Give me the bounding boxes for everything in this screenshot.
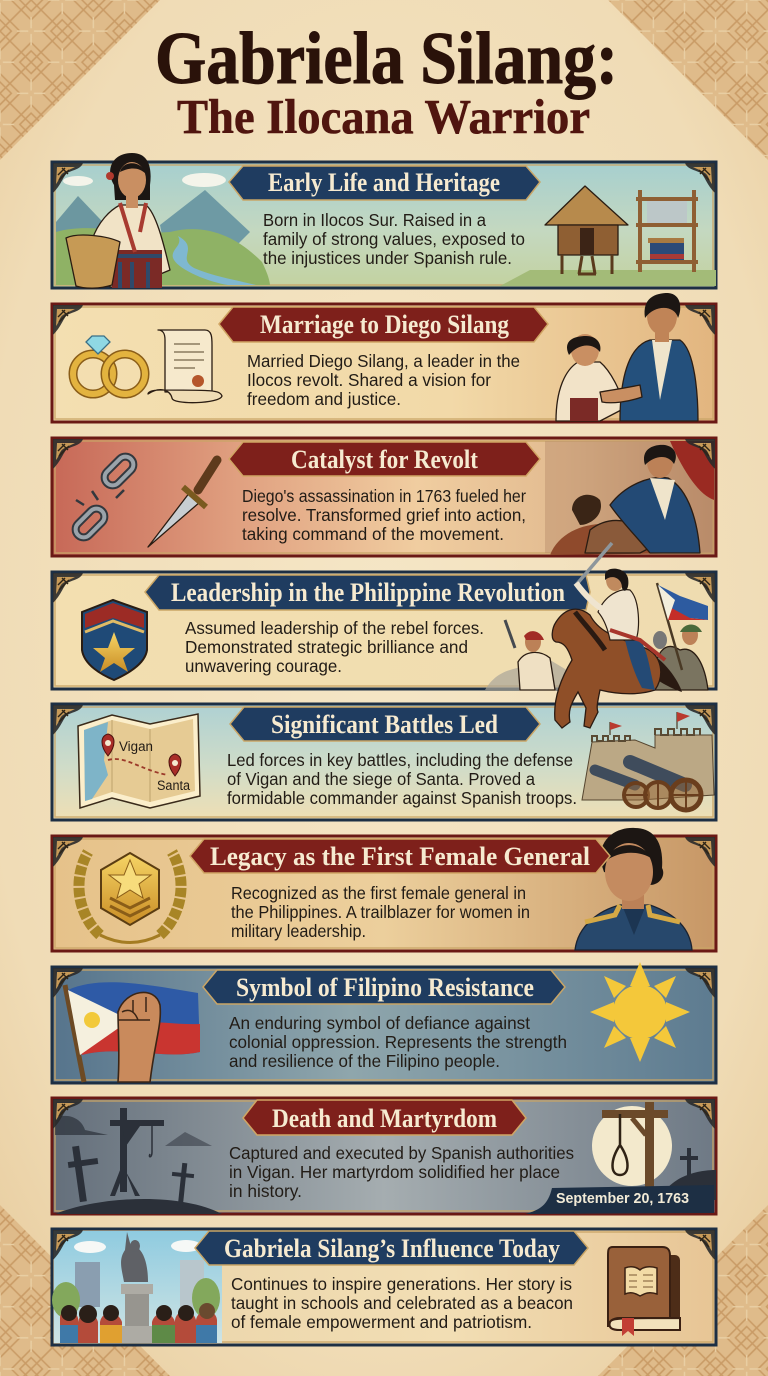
text: early life: the injustices under Spanish rule. xyxy=(263,248,512,268)
text: battles xyxy=(227,750,577,808)
text: early life: Born in Ilocos Sur. Raised in a xyxy=(263,210,486,230)
icon: broken chain xyxy=(72,453,137,541)
text: leadership: Demonstrated strategic brilliance and xyxy=(185,637,468,657)
icon: scroll xyxy=(148,330,222,403)
text: influence xyxy=(231,1274,573,1332)
heading: death: Death and Martyrdom xyxy=(272,1104,497,1133)
text: leadership: unwavering courage. xyxy=(185,656,342,676)
text: resistance: An enduring symbol of defiance against xyxy=(229,1013,530,1033)
text: catalyst: Diego's assassination in 1763 fueled her xyxy=(242,486,526,506)
text: influence: of female empowerment and patriotism. xyxy=(231,1312,532,1332)
panel: catalyst xyxy=(52,438,716,556)
text: catalyst: taking command of the movement. xyxy=(242,524,504,544)
corner pattern: bottom right xyxy=(598,1205,768,1376)
map xyxy=(78,714,200,808)
text: resistance: and resilience of the Filipino people. xyxy=(229,1051,500,1071)
text: early life: family of strong values, exposed to xyxy=(263,229,525,249)
scene: assassination xyxy=(545,441,714,555)
title xyxy=(155,18,618,144)
panel: leadership xyxy=(52,572,716,690)
heading: marriage: Marriage to Diego Silang xyxy=(260,310,509,339)
text: battles: formidable commander against Spanish troops. xyxy=(227,788,577,808)
icon: book xyxy=(608,1247,680,1336)
map: Vigan xyxy=(119,739,153,754)
text: marriage: Ilocos revolt. Shared a vision for xyxy=(247,370,491,390)
text: legacy: Recognized as the first female general in xyxy=(231,883,526,903)
text: leadership xyxy=(185,618,484,676)
date plate xyxy=(525,1185,714,1214)
icon: gold rings xyxy=(73,336,145,394)
heading: catalyst: Catalyst for Revolt xyxy=(291,445,478,474)
couple xyxy=(556,293,698,421)
title: The Ilocana Warrior xyxy=(177,89,590,144)
icon: dagger xyxy=(148,460,217,547)
heading: battles xyxy=(230,707,540,741)
text: legacy: the Philippines. A trailblazer for women in xyxy=(231,902,530,922)
date plate: September 20, 1763 xyxy=(556,1190,689,1207)
soldiers xyxy=(485,620,708,690)
text: marriage: freedom and justice. xyxy=(247,389,401,409)
heading: legacy: Legacy as the First Female General xyxy=(210,842,590,871)
panel: death xyxy=(52,1098,716,1214)
heading: resistance: Symbol of Filipino Resistance xyxy=(236,973,534,1002)
text: marriage xyxy=(247,351,520,409)
fort and cannons xyxy=(582,712,714,810)
text: death: in history. xyxy=(229,1181,302,1201)
heading: early life: Early Life and Heritage xyxy=(268,168,500,197)
icon: shield xyxy=(82,600,147,680)
heading: leadership: Leadership in the Philippine Revolution xyxy=(171,578,565,607)
woman with basket xyxy=(66,153,170,288)
loom xyxy=(636,190,698,272)
panel: early life xyxy=(52,153,716,288)
text: battles: of Vigan and the siege of Santa. Proved a xyxy=(227,769,535,789)
flag xyxy=(657,583,708,670)
text: early life xyxy=(263,210,525,268)
text: resistance xyxy=(229,1013,567,1071)
rider on horse xyxy=(552,543,682,728)
title: Gabriela Silang: xyxy=(155,18,618,100)
text: legacy: military leadership. xyxy=(231,921,366,941)
corner pattern: top left xyxy=(0,0,160,160)
panel: resistance xyxy=(52,962,716,1083)
hut xyxy=(500,186,716,286)
silhouette: left gallows and graves xyxy=(55,1108,222,1214)
heading: battles: Significant Battles Led xyxy=(271,710,498,739)
text: legacy xyxy=(231,883,530,941)
text: death xyxy=(229,1143,574,1201)
text: leadership: Assumed leadership of the rebel forces. xyxy=(185,618,484,638)
scene: statue and crowd xyxy=(52,1231,222,1343)
text: catalyst xyxy=(242,486,526,544)
scene: mountains and river xyxy=(56,173,270,285)
panel: marriage xyxy=(52,293,716,422)
corner pattern: bottom left xyxy=(0,1205,170,1376)
heading: influence: Gabriela Silang’s Influence Today xyxy=(224,1234,560,1263)
map: Santa xyxy=(157,778,190,793)
text: battles: Led forces in key battles, including the defense xyxy=(227,750,573,770)
panel: battles xyxy=(52,704,716,820)
panel: influence xyxy=(52,1229,716,1345)
text: resistance: colonial oppression. Represents the strength xyxy=(229,1032,567,1052)
text: marriage: Married Diego Silang, a leader in the xyxy=(247,351,520,371)
panel: legacy xyxy=(52,828,716,951)
text: influence: Continues to inspire generations. Her story is xyxy=(231,1274,572,1294)
heading: catalyst xyxy=(229,442,540,476)
icon: flag and fist xyxy=(65,982,200,1082)
panel corner ornaments xyxy=(53,163,715,1260)
text: death: Captured and executed by Spanish authorities xyxy=(229,1143,574,1163)
corner pattern: top right xyxy=(608,0,768,160)
text: catalyst: resolve. Transformed grief into action, xyxy=(242,505,526,525)
icon: laurel badge xyxy=(79,852,181,942)
woman general xyxy=(575,828,692,950)
icon: sun xyxy=(590,962,690,1062)
text: influence: taught in schools and celebrated as a beacon xyxy=(231,1293,573,1313)
text: death: in Vigan. Her martyrdom solidified her place xyxy=(229,1162,560,1182)
moon and noose xyxy=(592,1102,716,1200)
